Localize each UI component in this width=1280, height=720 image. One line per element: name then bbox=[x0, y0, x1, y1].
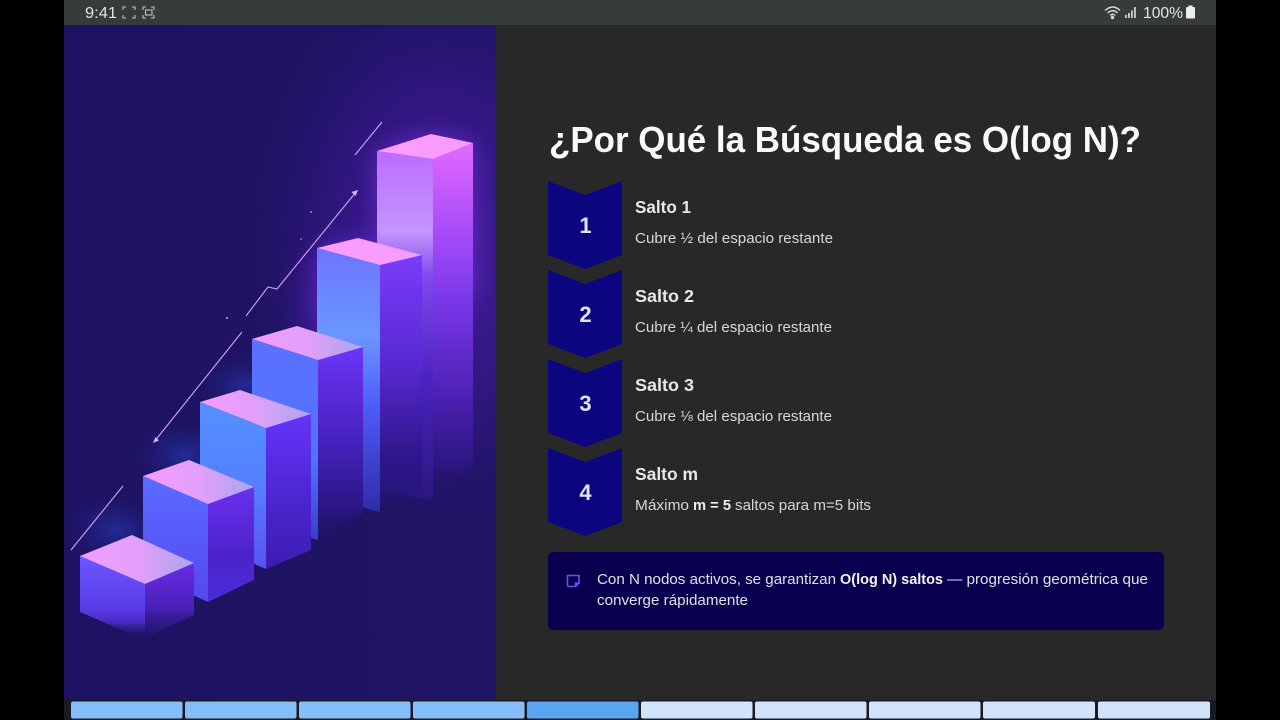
step 4 description bbox=[635, 498, 871, 514]
battery percentage: 100% bbox=[1143, 5, 1183, 22]
bar 5 bbox=[317, 238, 422, 512]
growth trend arrow bbox=[71, 122, 382, 550]
step 4 description: Máximo bbox=[635, 498, 689, 514]
number 3: 3 bbox=[579, 391, 592, 416]
icon: screen capture bbox=[143, 7, 154, 18]
chevron 3 bbox=[548, 359, 622, 447]
bar 4 bbox=[252, 326, 363, 540]
chevron 2 bbox=[548, 270, 622, 358]
step 3 description: Cubre ⅛ del espacio restante bbox=[635, 409, 832, 425]
step 1 heading: Salto 1 bbox=[635, 197, 691, 217]
number 2: 2 bbox=[579, 302, 592, 327]
step 2 description: Cubre ¼ del espacio restante bbox=[635, 320, 832, 336]
number 1: 1 bbox=[579, 213, 592, 238]
bar 6 bbox=[377, 134, 473, 500]
callout text: O(log N) saltos bbox=[840, 572, 943, 588]
step 2 bbox=[548, 270, 832, 358]
step 4 heading: Salto m bbox=[635, 464, 698, 484]
right content background bbox=[496, 25, 1216, 700]
callout text bbox=[597, 572, 1148, 609]
step 2 heading: Salto 2 bbox=[635, 286, 694, 306]
callout bbox=[548, 552, 1164, 630]
background glows bbox=[76, 26, 573, 597]
progress bar bbox=[64, 700, 1216, 720]
bar 1 bbox=[80, 535, 194, 640]
step 3 heading: Salto 3 bbox=[635, 375, 694, 395]
step 1 description: Cubre ½ del espacio restante bbox=[635, 231, 833, 247]
bar 3 bbox=[200, 390, 311, 569]
icon: note bbox=[568, 576, 579, 586]
chevron 4 bbox=[548, 448, 622, 536]
status bar bbox=[64, 0, 1216, 25]
callout text: converge rápidamente bbox=[597, 593, 748, 609]
number 4: 4 bbox=[579, 480, 592, 505]
title: ¿Por Qué la Búsqueda es O(log N)? bbox=[549, 119, 1141, 160]
panel: rising bars illustration bbox=[64, 25, 496, 700]
step 4 bbox=[548, 448, 871, 536]
step 1 bbox=[548, 181, 833, 269]
step 4 description: m = 5 bbox=[693, 498, 731, 514]
step 3 bbox=[548, 359, 832, 447]
chevron 1 bbox=[548, 181, 622, 269]
icon: signal bars bbox=[1125, 7, 1136, 18]
icon: wifi bbox=[1105, 7, 1120, 18]
callout text: Con N nodos activos, se garantizan bbox=[597, 572, 836, 588]
clock: 9:41 bbox=[85, 5, 117, 22]
callout text: — progresión geométrica que bbox=[947, 572, 1148, 588]
icon: screen frame bbox=[123, 7, 135, 18]
icon: battery bbox=[1186, 6, 1195, 18]
step 4 description: saltos para m=5 bits bbox=[735, 498, 871, 514]
sparkle dots bbox=[226, 211, 312, 319]
bar 2 bbox=[143, 460, 254, 602]
